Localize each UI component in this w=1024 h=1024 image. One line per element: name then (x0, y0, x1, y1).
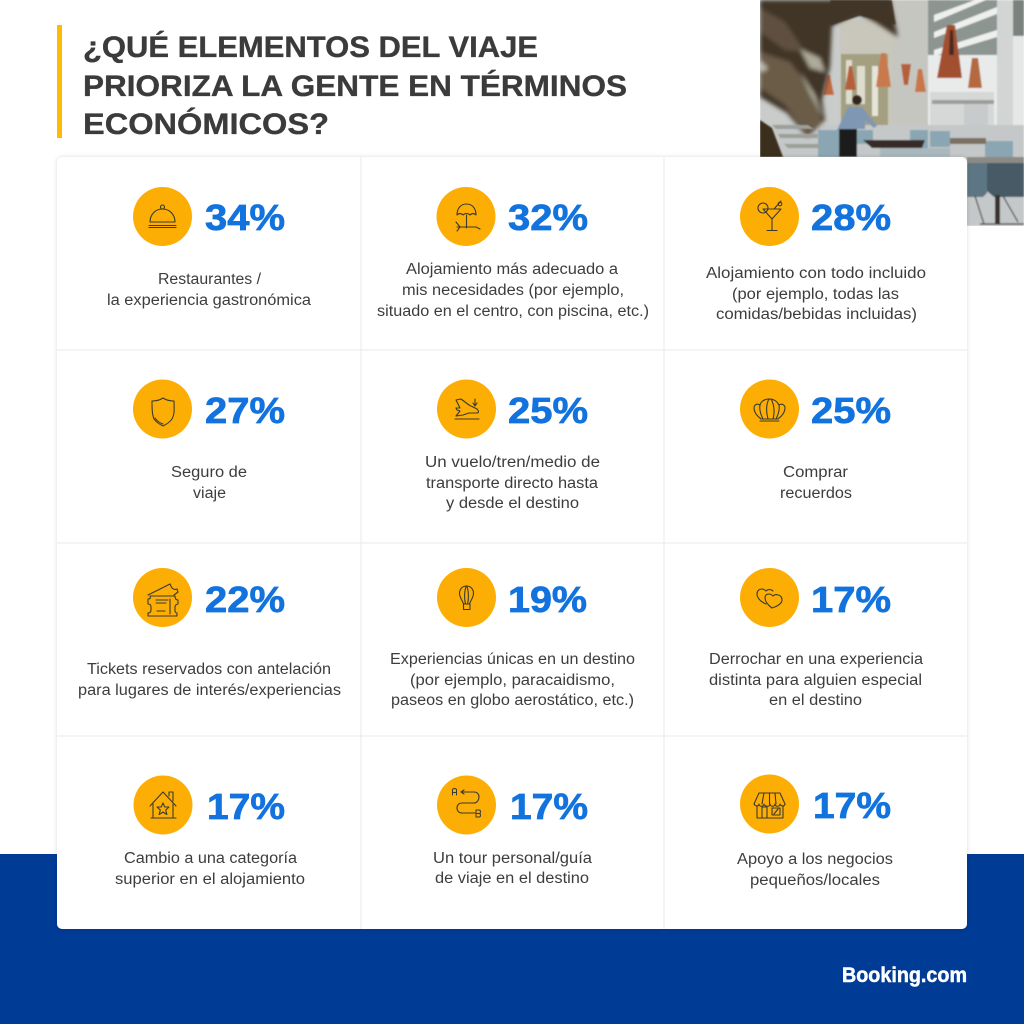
title: PRIORIZA LA GENTE EN TÉRMINOS (83, 69, 627, 103)
ceiling (830, 0, 896, 26)
percentage: 17% (207, 786, 285, 827)
description (433, 850, 592, 887)
logo: Booking.com: Booking.com (842, 964, 967, 987)
accent bar (57, 25, 62, 138)
icon: cocktail (740, 187, 799, 246)
percentage: 27% (205, 390, 285, 431)
description: Cambio a una categoría (124, 850, 297, 867)
cell: restaurantes 34% (107, 187, 311, 309)
description (780, 464, 852, 502)
cell: todo incluido 28% (706, 187, 926, 323)
icon: storefront (740, 774, 799, 834)
card shadow (57, 157, 967, 929)
description (425, 454, 600, 512)
card: statistics grid (57, 157, 967, 929)
description: y desde el destino (446, 495, 579, 512)
icon: house with star (134, 776, 192, 834)
title (83, 30, 627, 141)
description: Apoyo a los negocios (737, 851, 893, 868)
cell: alojamiento adecuado 32% (377, 187, 649, 320)
blurred plant foreground (760, 0, 898, 137)
description (171, 464, 247, 502)
icon: shield (133, 380, 192, 438)
icon: route A to B (437, 776, 496, 834)
description (390, 651, 635, 709)
description: Restaurantes / (158, 271, 262, 288)
cell: derrochar 17% (709, 568, 923, 709)
blue footer band (0, 854, 1024, 1024)
description (78, 661, 341, 699)
percentage: 28% (811, 197, 891, 238)
cell: tour personal 17% (433, 776, 592, 887)
description: viaje (193, 485, 226, 502)
description: para lugares de interés/experiencias (78, 682, 341, 699)
cell: recuerdos 25% (740, 380, 891, 502)
description: (por ejemplo, todas las (732, 286, 899, 303)
cell: transporte directo 25% (425, 380, 600, 512)
icon: tickets (133, 568, 192, 627)
icon: cloche (133, 187, 192, 246)
description (737, 851, 893, 889)
description: Tickets reservados con antelación (87, 661, 331, 678)
description (107, 271, 311, 309)
chairs and tables (818, 130, 1013, 157)
icon: two hearts (740, 568, 799, 627)
cell: seguro de viaje 27% (133, 380, 285, 502)
description: en el destino (769, 692, 862, 709)
description: recuerdos (780, 485, 852, 502)
cell: negocios locales 17% (737, 774, 893, 889)
description: distinta para alguien especial (709, 672, 922, 689)
percentage: 32% (508, 197, 588, 238)
cell: tickets 22% (78, 568, 341, 699)
description (709, 651, 923, 709)
photo: restaurant interior (760, 0, 1024, 226)
title: ECONÓMICOS? (83, 107, 329, 141)
description: superior en el alojamiento (115, 871, 305, 888)
description (377, 261, 649, 320)
floor stripes and dark foreground (760, 120, 820, 157)
hanging lamps (937, 25, 962, 78)
percentage: 22% (205, 579, 285, 620)
percentage: 25% (811, 390, 891, 431)
description: Un tour personal/guía (433, 850, 592, 867)
wall and column (893, 0, 928, 130)
icon: seashell (740, 380, 799, 438)
back room door (840, 20, 893, 125)
icon: hot air balloon (437, 568, 496, 627)
description: Alojamiento con todo incluido (706, 265, 926, 282)
percentage: 19% (508, 579, 587, 620)
description: pequeños/locales (750, 872, 880, 889)
description: Seguro de (171, 464, 247, 481)
description: Un vuelo/tren/medio de (425, 454, 600, 471)
description: (por ejemplo, paracaidismo, (410, 672, 615, 689)
description: de viaje en el destino (435, 870, 589, 887)
description: Derrochar en una experiencia (709, 651, 923, 668)
description: transporte directo hasta (426, 475, 598, 492)
title: ¿QUÉ ELEMENTOS DEL VIAJE (83, 30, 538, 64)
floor (864, 124, 1024, 149)
description: Experiencias únicas en un destino (390, 651, 635, 668)
percentage: 17% (811, 579, 891, 620)
description: Comprar (783, 464, 848, 481)
percentage: 34% (205, 197, 285, 238)
description: comidas/bebidas incluidas) (716, 306, 917, 323)
percentage: 25% (508, 390, 588, 431)
windows (928, 0, 997, 55)
description (115, 850, 305, 888)
icon: beach umbrella and lounger (436, 187, 496, 246)
description: paseos en globo aerostático, etc.) (391, 692, 634, 709)
waitress (852, 95, 862, 105)
description: la experiencia gastronómica (107, 292, 311, 309)
description: Alojamiento más adecuado a (406, 261, 618, 278)
percentage: 17% (510, 786, 588, 827)
description: mis necesidades (por ejemplo, (402, 282, 624, 299)
description: situado en el centro, con piscina, etc.) (377, 303, 649, 320)
cell: categoria superior 17% (115, 776, 305, 888)
percentage: 17% (813, 785, 891, 826)
cell: experiencias unicas 19% (390, 568, 635, 709)
description (706, 265, 926, 323)
icon: landing plane (437, 380, 496, 438)
